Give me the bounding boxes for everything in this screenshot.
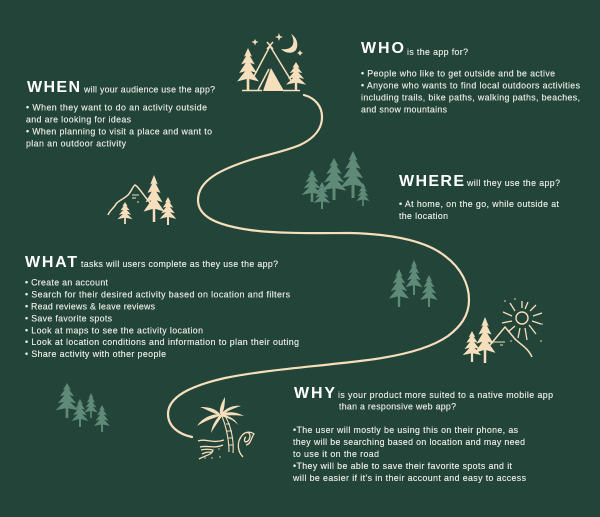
heading: why: WHY: [294, 385, 335, 402]
text block: where: [399, 199, 560, 221]
text block: what: • Share activity with other people: [25, 349, 166, 359]
heading: why: is your product more suited to a native mobile app: [338, 390, 553, 400]
heading: when: [27, 79, 215, 96]
heading: who: is the app for?: [407, 47, 468, 57]
icon: green trees near where: [302, 151, 370, 209]
heading: when: will your audience use the app?: [83, 84, 215, 94]
icon: palm tree and wave: [197, 397, 254, 459]
heading: who: WHO: [361, 40, 404, 57]
text block: what: • Search for their desired activity based on location and filters: [25, 289, 291, 299]
text block: why: •They will be able to save their favorite spots and it: [293, 461, 513, 471]
icon: mountain with trees: [108, 175, 176, 225]
text block: when: plan an outdoor activity: [26, 138, 127, 148]
text block: who: including trails, bike paths, walking paths, beaches,: [361, 92, 580, 102]
text block: what: [25, 277, 299, 359]
icon: green trees bottom left: [56, 383, 110, 432]
heading: who: [361, 40, 468, 57]
text block: who: • People who like to get outside and be active: [361, 68, 555, 78]
text block: why: to use it on the road: [293, 449, 379, 459]
text block: where: the location: [399, 211, 448, 221]
text block: why: they will be searching based on location and may need: [293, 437, 525, 447]
heading: where: [399, 173, 560, 190]
text block: when: [26, 102, 212, 148]
text block: what: • Save favorite spots: [25, 313, 113, 323]
text block: why: •The user will mostly be using this on their phone, as: [293, 425, 519, 435]
heading: what: tasks will users complete as they use the app?: [81, 259, 278, 269]
heading: where: WHERE: [399, 173, 464, 190]
heading: when: WHEN: [27, 79, 80, 96]
winding path: [168, 95, 469, 437]
heading: what: WHAT: [25, 254, 77, 271]
heading: what: [25, 254, 278, 271]
text block: where: • At home, on the go, while outside at: [399, 199, 560, 209]
text block: when: and are looking for ideas: [26, 114, 132, 124]
icon: tent with trees, moon and stars: [237, 33, 306, 91]
text block: what: • Look at maps to see the activity location: [25, 325, 203, 335]
text block: when: • When planning to visit a place and want to: [26, 126, 212, 136]
heading: where: will they use the app?: [466, 178, 560, 188]
text block: what: • Create an account: [25, 277, 109, 287]
text block: what: • Look at location conditions and information to plan their outing: [25, 337, 299, 347]
heading: why: than a responsive web app?: [339, 402, 456, 412]
text block: why: [292, 425, 527, 483]
text block: when: • When they want to do an activity outside: [26, 102, 207, 112]
text block: who: • Anyone who wants to find local outdoors activities: [361, 80, 581, 90]
heading: why: [294, 385, 553, 412]
icon: green trees mid right: [389, 260, 438, 307]
text block: why: will be easier if it’s in their account and easy to access: [292, 473, 527, 483]
text block: who: [361, 68, 581, 114]
text block: what: • Read reviews & leave reviews: [25, 301, 156, 311]
text block: who: and snow mountains: [361, 104, 448, 114]
icon: sun, mountain and trees: [463, 298, 543, 363]
